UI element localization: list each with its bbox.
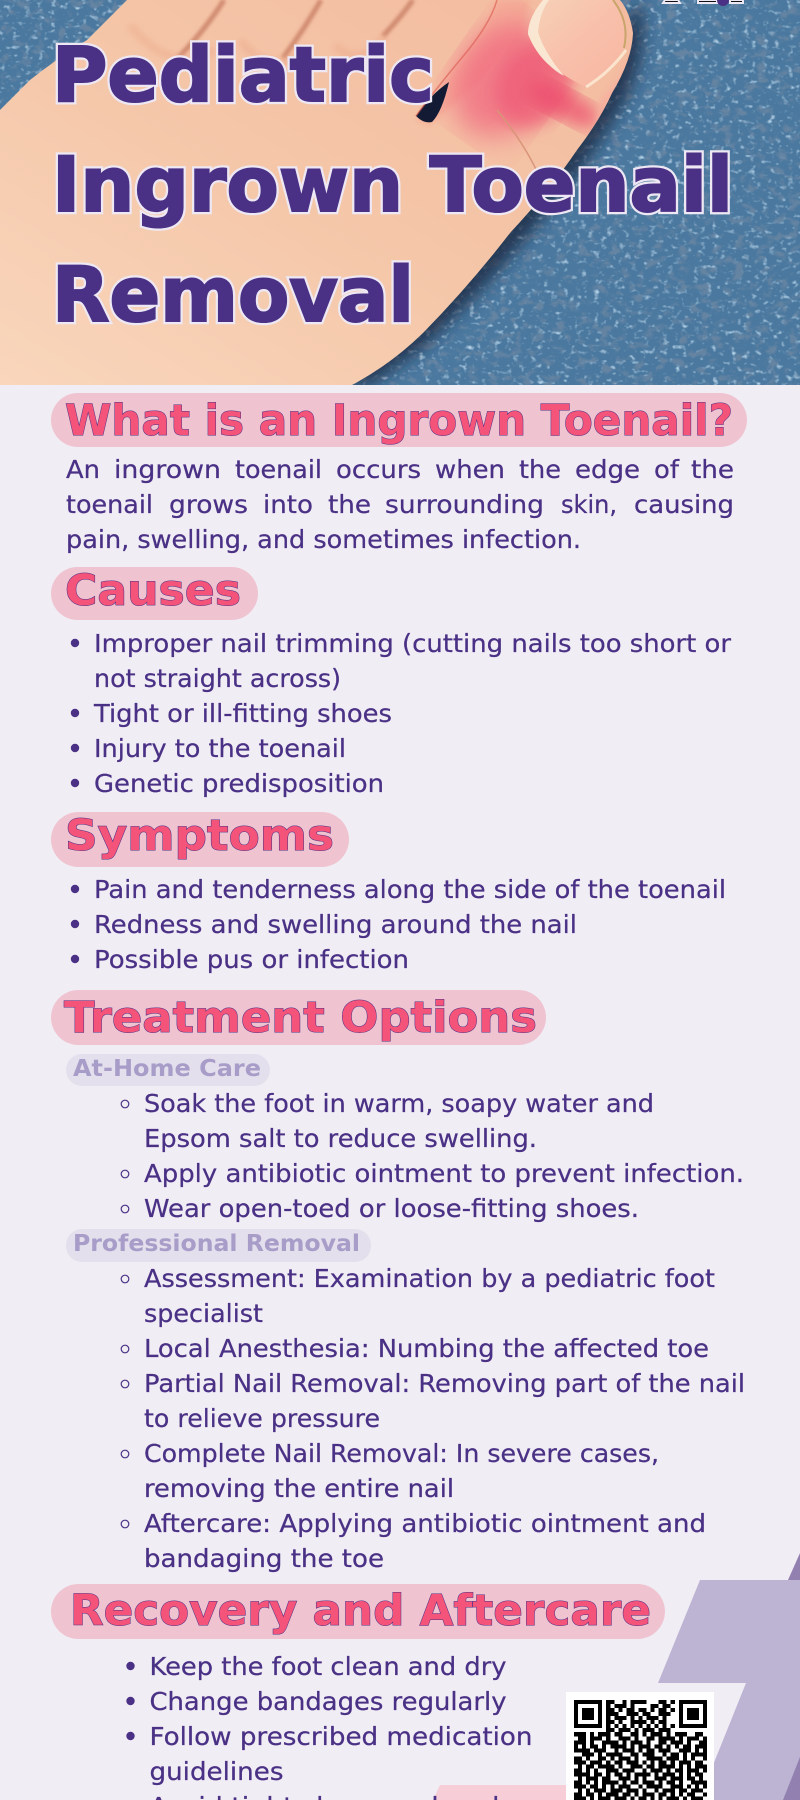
professional removal list: Local Anesthesia: Numbing the affected toe — [144, 1334, 709, 1363]
decorative pink shape — [433, 1785, 570, 1800]
definition paragraph: occurs — [336, 455, 421, 484]
definition paragraph: surrounding — [385, 490, 544, 519]
title: Ingrown Toenail — [52, 140, 733, 229]
recovery list — [126, 1652, 533, 1800]
decorative lavender shape — [658, 1580, 800, 1800]
definition paragraph: toenail — [66, 490, 153, 519]
header photo: inflamed toe on blue cloth — [0, 0, 800, 385]
causes list: Genetic predisposition — [94, 769, 384, 798]
title: Ingrown Toenail — [52, 140, 733, 229]
at-home care list: Soak the foot in warm, soapy water and — [144, 1089, 654, 1118]
title: Removal — [52, 250, 414, 339]
causes list: Injury to the toenail — [94, 734, 346, 763]
professional removal list: Aftercare: Applying antibiotic ointment and — [144, 1509, 706, 1538]
professional removal list: bandaging the toe — [144, 1544, 384, 1573]
symptoms list: Pain and tenderness along the side of the toenail — [94, 875, 726, 904]
definition paragraph: into — [263, 490, 313, 519]
section: causes — [51, 566, 732, 798]
at-home care list: Apply antibiotic ointment to prevent infection. — [144, 1159, 744, 1188]
decorative purple corner bottom — [783, 1757, 800, 1800]
definition paragraph: ingrown — [114, 455, 221, 484]
recovery list: Follow prescribed medication — [150, 1722, 532, 1751]
professional removal list: specialist — [144, 1299, 263, 1328]
recovery list: guidelines — [150, 1757, 284, 1786]
at-home care list: Wear open-toed or loose-fitting shoes. — [144, 1194, 639, 1223]
clipped logo fragment at top right — [663, 0, 743, 6]
symptoms list — [71, 875, 726, 974]
professional removal list: Complete Nail Removal: In severe cases, — [144, 1439, 659, 1468]
heading pill: Symptoms — [65, 811, 334, 861]
recovery list: Change bandages regularly — [150, 1687, 507, 1716]
causes list: Tight or ill-fitting shoes — [93, 699, 392, 728]
definition paragraph: the — [691, 455, 734, 484]
at-home care list: Epsom salt to reduce swelling. — [144, 1124, 537, 1153]
definition paragraph: toenail — [235, 455, 322, 484]
symptoms list: Redness and swelling around the nail — [94, 910, 577, 939]
professional removal list: Assessment: Examination by a pediatric foot — [144, 1264, 715, 1293]
section: symptoms — [51, 811, 726, 974]
decorative purple corner top — [788, 1553, 800, 1580]
professional removal list: Partial Nail Removal: Removing part of the nail — [144, 1369, 745, 1398]
heading pill: What is an Ingrown Toenail? — [65, 396, 733, 446]
title: Pediatric — [52, 30, 434, 119]
definition paragraph: grows — [169, 490, 248, 519]
professional removal list — [121, 1264, 745, 1573]
recovery list: Keep the foot clean and dry — [150, 1652, 507, 1681]
heading pill: Recovery and Aftercare — [70, 1586, 651, 1636]
definition paragraph: of — [654, 455, 680, 484]
professional removal list: removing the entire nail — [144, 1474, 454, 1503]
title: Pediatric — [52, 30, 434, 119]
definition paragraph: pain, swelling, and sometimes infection. — [66, 525, 581, 554]
causes list: Improper nail trimming (cutting nails too short or — [94, 629, 732, 658]
definition paragraph: the — [328, 490, 371, 519]
subheading: at-home care: At-Home Care — [73, 1056, 261, 1082]
definition paragraph — [66, 455, 734, 554]
causes list — [71, 629, 732, 798]
section: recovery and aftercare — [51, 1584, 665, 1800]
symptoms list: Possible pus or infection — [94, 945, 409, 974]
causes list: not straight across) — [94, 664, 341, 693]
heading pill: Causes — [65, 566, 241, 616]
subheading: professional removal: Professional Removal — [73, 1231, 360, 1257]
definition paragraph: the — [519, 455, 561, 484]
title — [52, 30, 733, 339]
at-home care list — [121, 1089, 744, 1223]
definition paragraph: when — [435, 455, 505, 484]
definition paragraph: causing — [634, 490, 734, 519]
definition paragraph: edge — [575, 455, 640, 484]
heading pill: Treatment Options — [64, 993, 537, 1043]
title: Removal — [52, 250, 414, 339]
definition paragraph: An — [66, 455, 100, 484]
definition paragraph: skin, — [561, 490, 617, 519]
professional removal list: to relieve pressure — [144, 1404, 380, 1433]
QR code — [566, 1692, 714, 1800]
section: what is an ingrown toenail — [51, 393, 747, 554]
section: treatment options — [51, 990, 745, 1573]
